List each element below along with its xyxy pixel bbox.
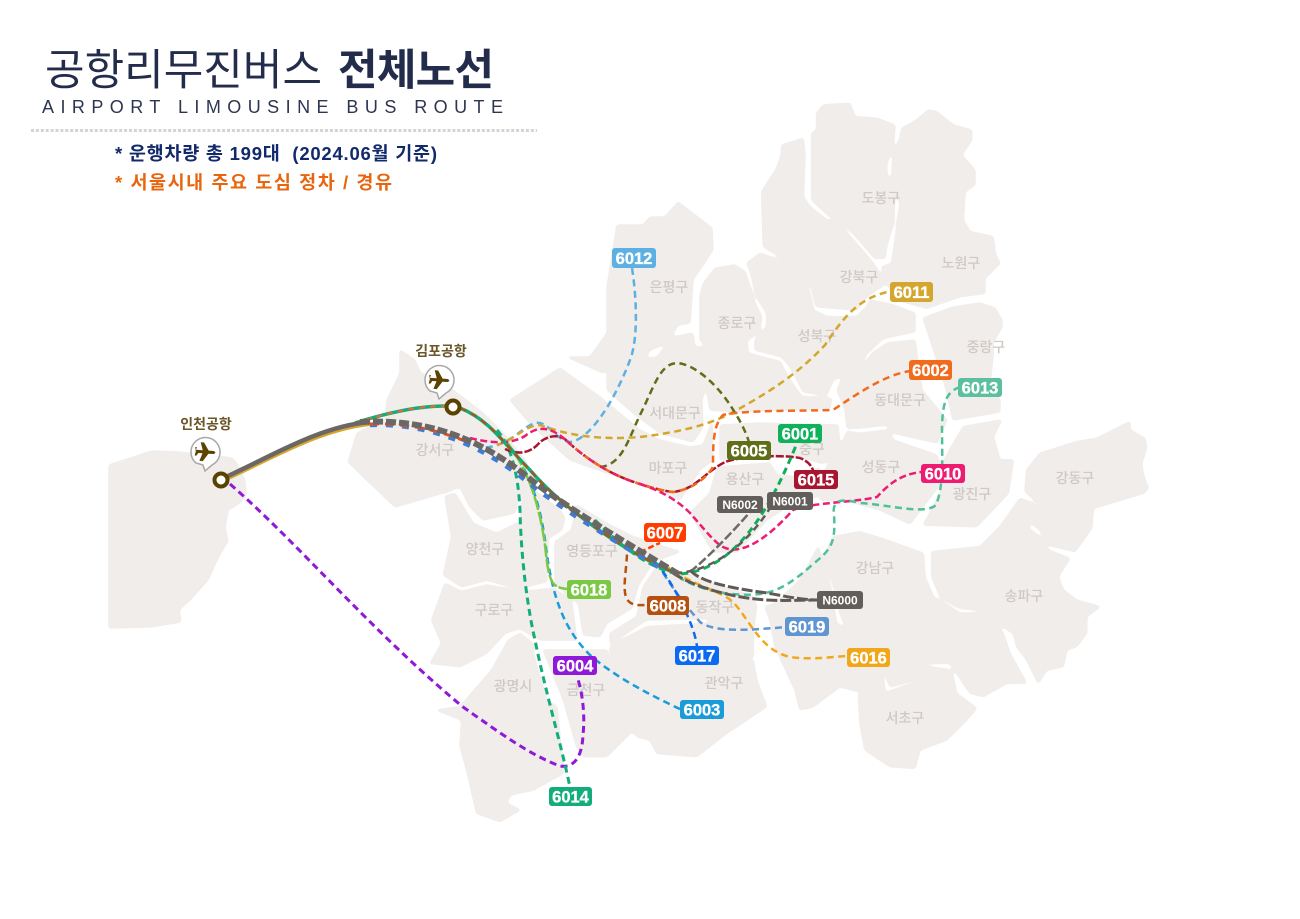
badge 6013: 6013 — [962, 380, 998, 398]
district: Dobong — [812, 103, 895, 258]
district: Yangcheon — [443, 488, 565, 588]
badge 6015: 6015 — [798, 472, 834, 490]
route 6008 — [625, 543, 648, 605]
badge N6001 — [767, 492, 813, 510]
route 6012 — [483, 268, 636, 448]
district labels: 용산구 — [726, 471, 764, 487]
district labels: 중구 — [799, 441, 825, 457]
Gimpo branch overlay — [355, 406, 445, 423]
district: Yeongdeungpo — [555, 505, 680, 637]
district: Geumcheon — [543, 650, 633, 757]
route 6002 — [567, 371, 910, 492]
district labels: 광진구 — [953, 486, 991, 502]
district: Dongjak — [610, 567, 757, 660]
trunk Incheon to Gimpo fork — [228, 423, 370, 477]
district labels: 노원구 — [942, 255, 980, 271]
district: Yongsan — [690, 463, 820, 552]
badge 6014: 6014 — [552, 788, 590, 806]
note: vehicle count: * 운행차량 총 199대 (2024.06월 기준) — [115, 143, 437, 164]
badge 6018: 6018 — [571, 582, 607, 600]
district labels: 관악구 — [705, 675, 743, 691]
district labels: 강남구 — [856, 560, 894, 576]
district: Guro — [430, 583, 577, 667]
districts drawn from scaled coordinates (south-east) — [765, 420, 1148, 768]
district: Incheon — [109, 451, 246, 628]
district labels: 영등포구 — [566, 543, 618, 559]
district: Gangseo — [348, 350, 535, 520]
district: Gangbuk — [762, 138, 887, 310]
district labels: 성북구 — [798, 328, 836, 344]
district: Seongdong — [820, 430, 940, 524]
route 6010 — [567, 441, 640, 484]
badge 6001: 6001 — [782, 426, 818, 444]
subtitle: AIRPORT LIMOUSINE BUS ROUTE — [42, 97, 503, 117]
district labels: 종로구 — [718, 315, 756, 331]
district labels: 금천구 — [567, 682, 605, 698]
badge 6008: 6008 — [650, 598, 686, 616]
district labels: 은평구 — [650, 279, 688, 295]
Incheon airport marker — [180, 416, 232, 486]
route 6018 — [505, 440, 567, 589]
route 6005 — [600, 363, 749, 467]
trunk underlay red — [370, 424, 465, 441]
district labels: 성동구 — [862, 459, 900, 475]
badge 6004: 6004 — [557, 658, 594, 676]
district labels: 강서구 — [416, 442, 454, 458]
districts drawn from scaled coordinates (south-west) — [430, 488, 767, 822]
route 6007 — [640, 543, 660, 552]
badge 6010: 6010 — [925, 466, 961, 484]
district: Seocho west — [765, 547, 885, 710]
district labels: 송파구 — [1005, 588, 1043, 604]
district labels: 광명시 — [494, 678, 532, 694]
district labels: 강동구 — [1056, 470, 1094, 486]
district labels: 서대문구 — [649, 405, 701, 421]
route 6015 — [505, 436, 814, 492]
route 6017 — [655, 562, 697, 647]
district labels: 동대문구 — [874, 392, 926, 408]
title: 전체노선 — [338, 47, 494, 95]
map of districts — [109, 103, 1148, 822]
districts drawn from scaled coordinates (north) — [700, 103, 1000, 412]
route 6019 — [657, 563, 787, 630]
trunk underlay — [370, 425, 665, 571]
district: Gwangjin — [923, 420, 1013, 527]
district labels: 도봉구 — [862, 190, 900, 206]
district: Jongno — [700, 265, 832, 412]
Gimpo branch colored — [355, 406, 445, 423]
district: Seodaemun — [607, 333, 710, 442]
badge N6002: N6002 — [722, 498, 758, 512]
title — [45, 47, 494, 95]
district: Songpa — [932, 498, 1100, 683]
trunk thick gray — [360, 422, 680, 575]
note: downtown stops: * 서울시내 주요 도심 정차 / 경유 — [115, 172, 392, 193]
route badges — [549, 248, 1002, 806]
badge 6012: 6012 — [616, 250, 652, 268]
district: Gangdong — [1025, 422, 1148, 552]
badge 6011: 6011 — [894, 284, 929, 302]
route 6010 main — [470, 429, 922, 549]
title: 공항리무진버스 — [45, 47, 322, 95]
route N6000 — [673, 573, 820, 600]
route 6013 — [680, 387, 960, 595]
badge N6002 — [717, 496, 763, 513]
district: Mapo — [510, 368, 713, 500]
district: Nowon — [882, 110, 1000, 308]
district labels: 양천구 — [466, 541, 504, 557]
badge 6005: 6005 — [731, 442, 767, 460]
route 6011 — [497, 291, 892, 445]
route 6016 — [665, 565, 848, 658]
badge 6003: 6003 — [684, 702, 720, 720]
route 6014 — [497, 430, 570, 787]
district: Gwangmyeong — [437, 633, 563, 822]
district labels: 서초구 — [886, 710, 924, 726]
district: Gwanak — [610, 623, 767, 757]
Gimpo airport marker — [415, 343, 467, 414]
Gimpo airport marker: 김포공항 — [415, 343, 467, 359]
badge 6019: 6019 — [789, 618, 825, 636]
district labels — [416, 190, 1094, 726]
district labels: 구로구 — [475, 602, 513, 618]
Gimpo eastbound overlay — [460, 408, 675, 573]
district labels: 중랑구 — [967, 339, 1005, 355]
badge 6016: 6016 — [850, 650, 887, 668]
district: Dongdaemun — [837, 340, 947, 443]
district labels: 마포구 — [649, 460, 687, 476]
route N6000 upper — [690, 570, 820, 600]
district labels: 동작구 — [696, 599, 734, 615]
district: Jung-gu — [720, 423, 840, 463]
badge 6002: 6002 — [912, 362, 949, 380]
badge N6000: N6000 — [822, 594, 858, 608]
trunk Incheon main — [228, 422, 370, 476]
district: Seongbuk — [747, 253, 915, 395]
route 6001 — [595, 443, 797, 574]
badge 6007: 6007 — [647, 524, 683, 542]
district: Jungnang — [923, 303, 1002, 420]
district: Seocho — [858, 667, 977, 768]
district: Eunpyeong — [567, 202, 713, 373]
route N6002 — [690, 512, 750, 572]
badge N6001: N6001 — [772, 494, 808, 508]
route N6001 — [675, 508, 770, 573]
bus routes — [228, 268, 960, 787]
district labels: 강북구 — [840, 269, 878, 285]
Incheon airport marker: 인천공항 — [180, 416, 232, 432]
route 6004 — [230, 484, 584, 766]
badge N6000 — [817, 591, 863, 609]
district: Gangnam — [823, 532, 1027, 697]
route 6003 — [505, 440, 682, 710]
Gimpo eastbound — [460, 408, 675, 573]
badge 6017: 6017 — [679, 648, 715, 666]
